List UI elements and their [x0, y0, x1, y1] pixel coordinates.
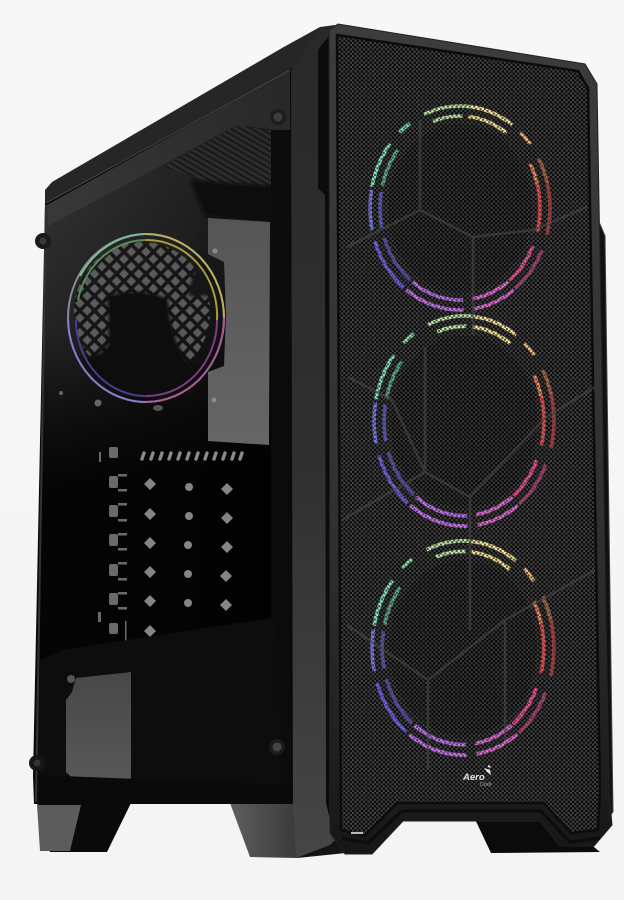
psu screw	[67, 675, 75, 683]
left foot	[37, 803, 131, 852]
bezel inner trim	[342, 811, 600, 843]
glass left edge highlight	[36, 205, 46, 802]
glass screw bottom right	[269, 739, 285, 755]
bottom fan ring	[372, 541, 554, 755]
glass screw bottom left	[29, 755, 45, 771]
motherboard mounting holes	[144, 478, 233, 637]
glass top edge highlight	[46, 70, 290, 203]
front mesh panel	[337, 35, 600, 836]
column dark channel	[318, 28, 335, 835]
power supply	[66, 672, 131, 783]
right interior shadow	[271, 130, 292, 790]
right foot	[473, 815, 600, 853]
glass screw top left	[35, 233, 51, 249]
rgb fan rings	[370, 106, 554, 755]
fan mount screws	[59, 248, 218, 411]
logo swoosh	[484, 765, 491, 775]
small front mark	[351, 832, 363, 834]
top interior mesh	[164, 125, 271, 186]
glass tint	[44, 103, 290, 408]
shadow below top mesh	[190, 179, 271, 220]
top fan ring	[370, 106, 550, 310]
mesh surface	[337, 35, 600, 836]
glass darkening	[133, 126, 274, 408]
middle foot	[230, 803, 346, 858]
fan hub and blades	[80, 290, 192, 394]
side glass frame	[33, 68, 294, 804]
front bezel	[329, 24, 612, 854]
motherboard left components	[98, 447, 127, 641]
glass screw top right	[270, 109, 286, 125]
fan	[68, 234, 224, 402]
fan shadows behind mesh	[388, 124, 538, 736]
middle fan ring	[374, 316, 554, 526]
fan grille	[74, 242, 210, 362]
rgb outer ring	[68, 234, 224, 402]
feet	[37, 803, 600, 858]
logo subtext: Cool	[480, 782, 491, 788]
rear panel strip	[590, 222, 613, 830]
brand logo	[462, 765, 491, 788]
motherboard tray plate	[208, 218, 270, 445]
hexagon ribs	[342, 120, 595, 770]
glass side panel	[44, 70, 290, 779]
top cover	[45, 25, 335, 204]
rgb inner ring	[76, 240, 217, 396]
expansion slot row	[142, 453, 242, 459]
logo wordmark: Aero	[462, 772, 485, 783]
psu shroud	[97, 618, 271, 784]
fan top right shadow	[186, 258, 208, 298]
front corner column	[291, 25, 335, 858]
top light band	[47, 70, 290, 226]
